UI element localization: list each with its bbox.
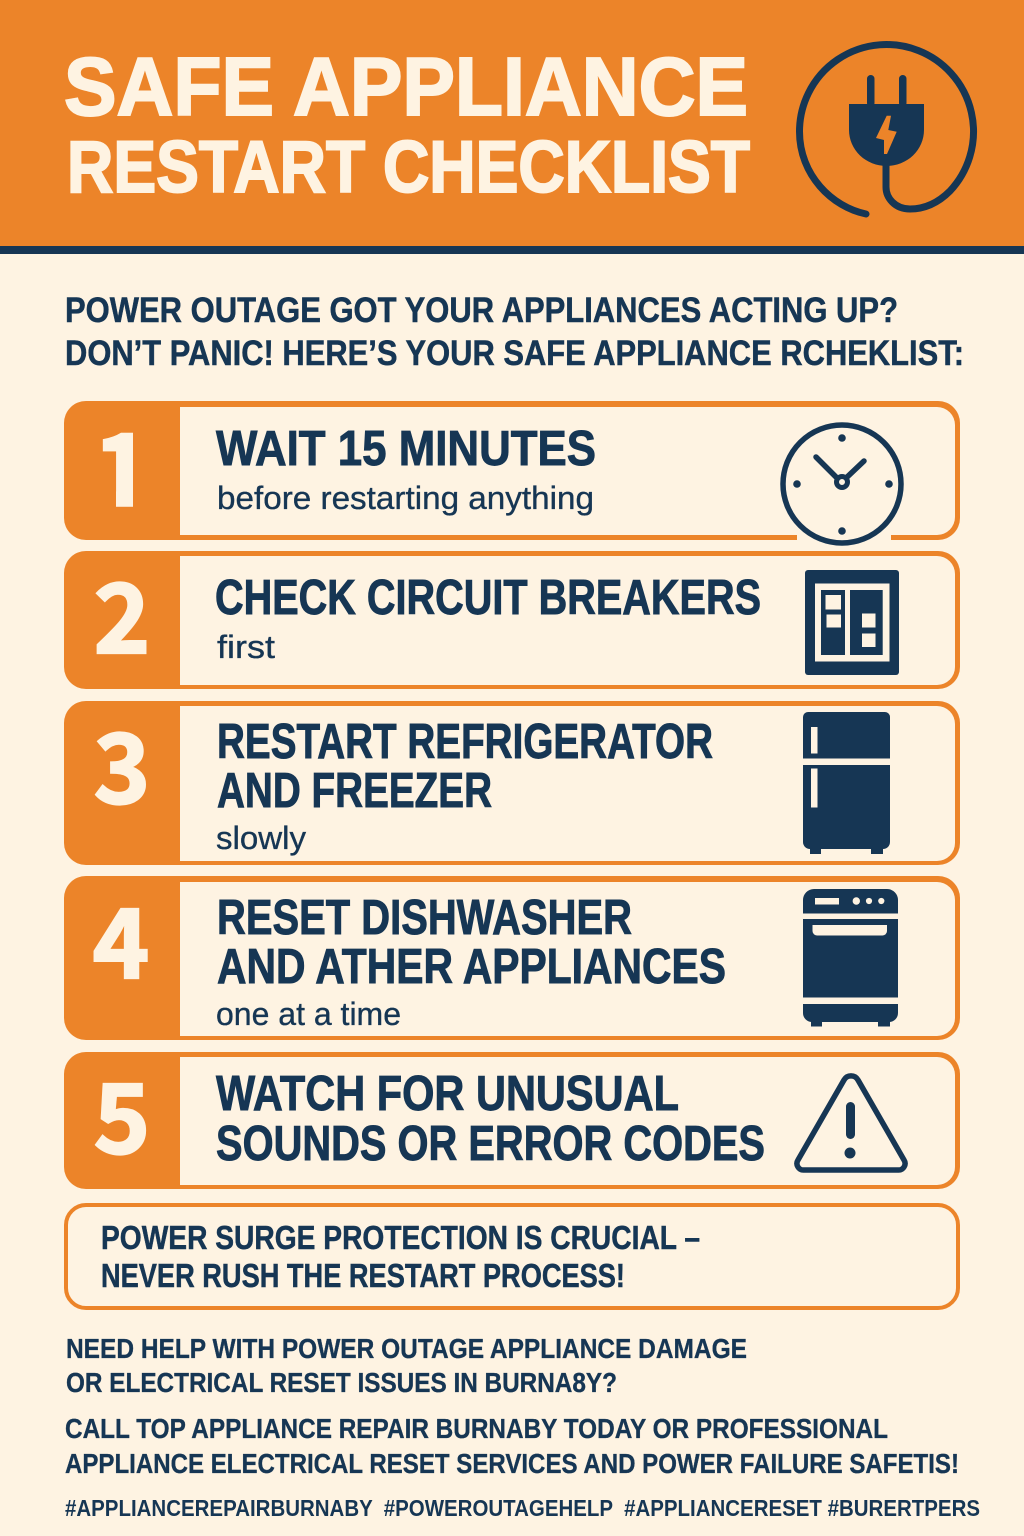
panel: step 5 (64, 1042, 960, 1189)
step 4 heading (217, 891, 726, 994)
step 5 heading: WATCH FOR UNUSUAL (216, 1067, 679, 1121)
step number 3: 3 (94, 692, 150, 831)
step number 1: 1 (94, 392, 152, 534)
icon: warning triangle (797, 1076, 905, 1170)
step number 5: 5 (94, 1042, 150, 1181)
panel: step 3 (64, 692, 960, 865)
help text (66, 1333, 747, 1398)
step 2 heading: CHECK CIRCUIT BREAKERS (215, 571, 761, 625)
header banner (0, 0, 1024, 254)
help text: OR ELECTRICAL RESET ISSUES IN BURNA8Y? (66, 1367, 617, 1398)
title: RESTART CHECKLIST (67, 127, 750, 208)
title (64, 40, 750, 208)
step 4 heading: RESET DISHWASHER (217, 891, 632, 945)
step number 4: 4 (93, 867, 149, 1006)
icon: clock (783, 425, 901, 543)
title: SAFE APPLIANCE (64, 40, 748, 133)
callout: surge protection: NEVER RUSH THE RESTART PROCESS! (101, 1257, 625, 1294)
step 3 heading: RESTART REFRIGERATOR (217, 715, 713, 769)
help text: NEED HELP WITH POWER OUTAGE APPLIANCE DAMAGE (66, 1333, 747, 1364)
icon: refrigerator (803, 712, 890, 854)
step 4 detail: one at a time (216, 996, 401, 1032)
panel: step 1 (64, 392, 960, 543)
icon: plug with cord (800, 45, 974, 214)
panel: step 2 (64, 542, 960, 689)
callout: surge protection: POWER SURGE PROTECTION IS CRUCIAL – (101, 1219, 700, 1256)
step 5 heading: SOUNDS OR ERROR CODES (216, 1117, 765, 1171)
call to action: CALL TOP APPLIANCE REPAIR BURNABY TODAY OR PROFESSIONAL (65, 1413, 888, 1444)
callout: surge protection (66, 1205, 958, 1308)
step 2 detail: first (217, 629, 275, 665)
step 3 detail: slowly (216, 820, 306, 856)
step number 2: 2 (94, 542, 150, 681)
step 3 heading (217, 715, 713, 818)
intro text (65, 291, 964, 373)
step 1 heading: WAIT 15 MINUTES (216, 422, 596, 476)
step 1 detail: before restarting anything (217, 480, 594, 516)
step 3 heading: AND FREEZER (217, 764, 492, 818)
call to action (65, 1413, 959, 1479)
step 5 heading (216, 1067, 765, 1171)
step 4 heading: AND ATHER APPLIANCES (217, 940, 726, 994)
intro text: POWER OUTAGE GOT YOUR APPLIANCES ACTING UP? (65, 291, 898, 330)
icon: dishwasher (803, 889, 898, 1026)
icon: circuit breaker panel (805, 570, 899, 675)
panel: step 4 (64, 867, 960, 1040)
